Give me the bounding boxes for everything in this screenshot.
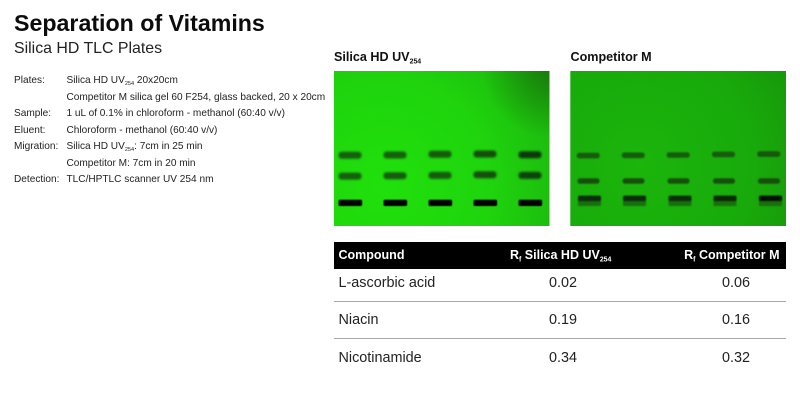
row: Nicotinamide: 0.32 xyxy=(722,350,750,366)
text block: method details: Silica HD UV254 20x20cm xyxy=(66,74,178,86)
table: Rf values xyxy=(334,242,786,366)
plate: Silica HD UV254 xyxy=(334,71,550,226)
row: Nicotinamide xyxy=(338,350,750,366)
text block: method details: TLC/HPTLC scanner UV 254 nm xyxy=(66,174,213,184)
row: L-ascorbic acid: 0.06 xyxy=(722,274,750,290)
table header row: Rf Silica HD UV254 xyxy=(510,248,611,263)
row: L-ascorbic acid: L-ascorbic acid xyxy=(338,274,435,290)
text block: method details: Chloroform - methanol (60:40 v/v) xyxy=(66,124,217,136)
table header row: Rf Competitor M xyxy=(684,248,780,263)
row: Niacin: 0.16 xyxy=(722,312,750,328)
text block: method details: Competitor M: 7cm in 20 min xyxy=(66,158,196,168)
row: L-ascorbic acid xyxy=(338,274,750,290)
row: Nicotinamide: Nicotinamide xyxy=(338,350,422,366)
text block: method details: Detection: xyxy=(14,174,59,184)
text block: method details: Plates: xyxy=(14,74,45,86)
table header row xyxy=(334,242,786,269)
text block: method details: Migration: xyxy=(14,140,58,152)
heading: Silica HD plate: Silica HD UV254 xyxy=(334,50,421,65)
heading: Competitor M plate: Competitor M xyxy=(570,50,652,64)
text block: method details: Eluent: xyxy=(14,124,45,136)
row: Niacin xyxy=(338,312,750,328)
row: L-ascorbic acid: 0.02 xyxy=(549,274,577,290)
text block: method details: Competitor M silica gel 60 F254, glass backed, 20 x 20cm xyxy=(66,92,325,102)
row: Niacin: 0.19 xyxy=(549,312,577,328)
title: Separation of Vitamins xyxy=(14,10,265,36)
row: Nicotinamide: 0.34 xyxy=(549,350,577,366)
text block: method details xyxy=(14,74,325,184)
text block: method details: Sample: xyxy=(14,108,51,118)
plate: Competitor M xyxy=(570,71,786,226)
subtitle: Silica HD TLC Plates xyxy=(14,40,162,57)
text block: method details: Silica HD UV254: 7cm in 25 min xyxy=(66,140,203,152)
row: Niacin: Niacin xyxy=(338,312,378,328)
text block: method details: 1 uL of 0.1% in chloroform - methanol (60:40 v/v) xyxy=(66,108,285,118)
table header row: Compound xyxy=(338,248,404,262)
